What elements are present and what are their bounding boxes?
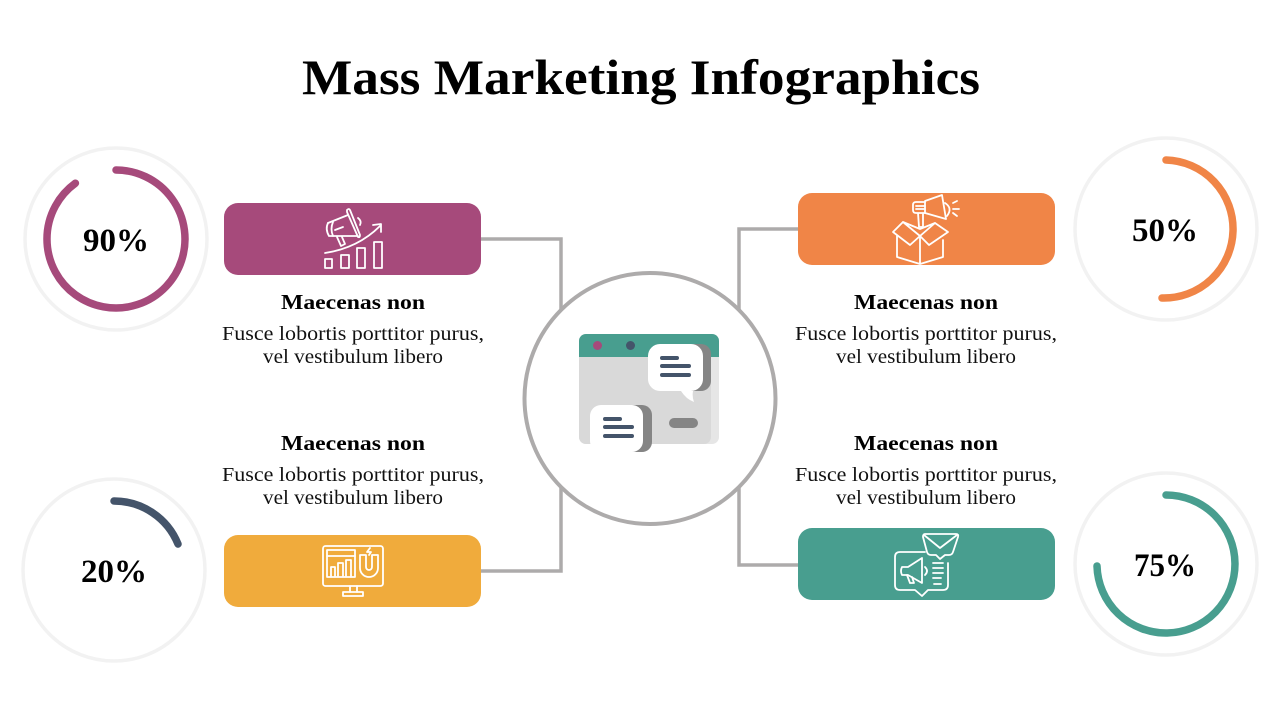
icon: box with megaphone bbox=[893, 195, 959, 264]
text block bbox=[222, 290, 484, 368]
text block: vel vestibulum libero bbox=[263, 347, 443, 368]
text block: vel vestibulum libero bbox=[263, 488, 443, 509]
bar: purple with icon bbox=[224, 203, 481, 275]
bar: yellow with icon bbox=[224, 535, 481, 607]
text block: Maecenas non bbox=[281, 290, 425, 314]
gauge: 20% bbox=[23, 479, 205, 661]
text block: Maecenas non bbox=[281, 431, 425, 455]
title: Mass Marketing Infographics bbox=[302, 49, 980, 105]
gauge: 90% bbox=[25, 148, 207, 330]
icon: monitor with chart and magnet bbox=[323, 546, 383, 596]
text block: Maecenas non bbox=[854, 431, 998, 455]
gauge: 50%: 50% bbox=[1132, 213, 1198, 249]
bar: orange with icon bbox=[798, 193, 1055, 265]
panel: bottom-left 20% bbox=[23, 431, 484, 661]
bar: teal with icon bbox=[798, 528, 1055, 600]
gauge: 75% bbox=[1075, 473, 1257, 655]
icon: browser with chat bubbles bbox=[579, 334, 719, 452]
text block: Fusce lobortis porttitor purus, bbox=[222, 324, 484, 345]
icon: envelope and megaphone in speech bubble bbox=[895, 534, 958, 596]
gauge: 90%: 90% bbox=[83, 223, 149, 259]
connectors from center hub to the four bars bbox=[481, 229, 798, 571]
text block bbox=[795, 290, 1057, 368]
text block: vel vestibulum libero bbox=[836, 488, 1016, 509]
gauge: 20%: 20% bbox=[81, 554, 147, 590]
text block: Maecenas non bbox=[854, 290, 998, 314]
gauge: 75%: 75% bbox=[1134, 548, 1196, 584]
text block: Fusce lobortis porttitor purus, bbox=[795, 465, 1057, 486]
icon: megaphone and growth chart bbox=[325, 209, 382, 268]
gauge: 50% bbox=[1075, 138, 1257, 320]
panel: top-left 90% bbox=[25, 148, 484, 368]
panel: bottom-right 75% bbox=[795, 431, 1257, 655]
text block: Fusce lobortis porttitor purus, bbox=[795, 324, 1057, 345]
text block bbox=[222, 431, 484, 509]
panel: top-right 50% bbox=[795, 138, 1257, 368]
text block: vel vestibulum libero bbox=[836, 347, 1016, 368]
text block bbox=[795, 431, 1057, 509]
center hub bbox=[524, 273, 776, 524]
text block: Fusce lobortis porttitor purus, bbox=[222, 465, 484, 486]
